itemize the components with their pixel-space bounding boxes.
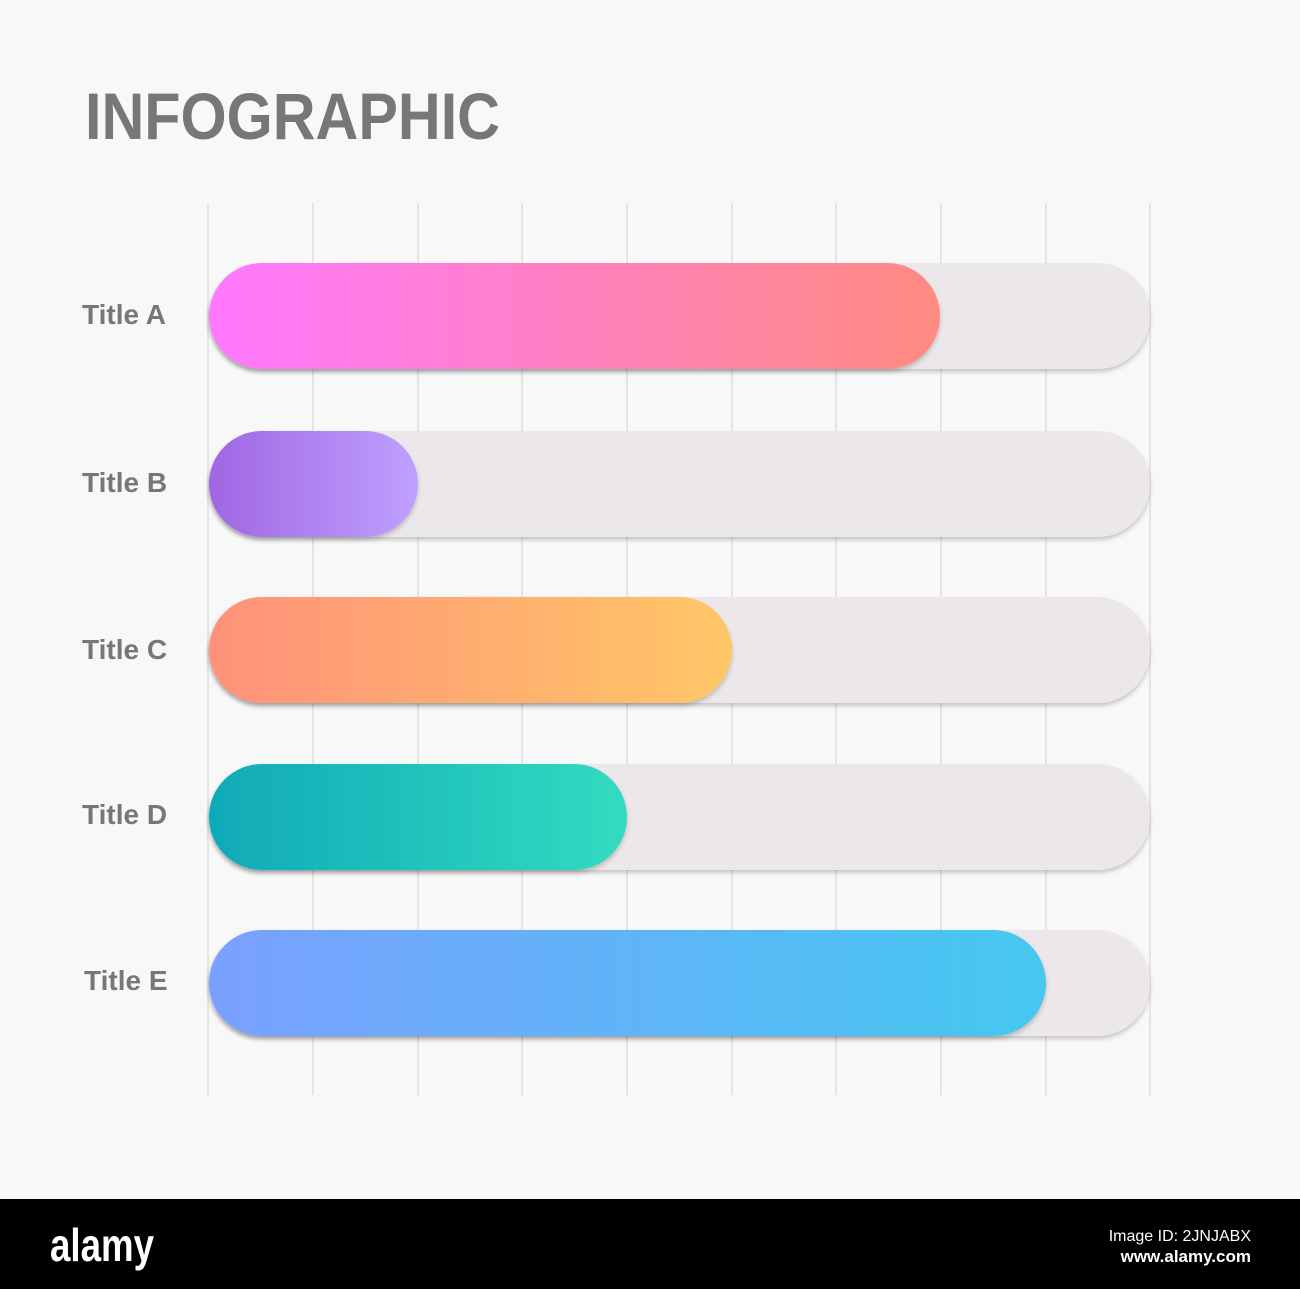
row: Title B: Title B: [82, 467, 167, 498]
title: INFOGRAPHIC: [85, 79, 500, 153]
row: Title B: [82, 431, 1150, 537]
row: Title D: [82, 764, 1150, 870]
row: Title E: [84, 930, 1150, 1036]
row: Title A: Title A: [82, 299, 166, 330]
footer image id: Image ID: 2JNJABX: [1109, 1228, 1251, 1245]
footer band: [0, 1199, 1300, 1289]
row: Title C: Title C: [82, 634, 167, 665]
footer url: www.alamy.com: [1120, 1247, 1251, 1266]
row: Title D: Title D: [82, 799, 167, 830]
bar chart: [82, 263, 1150, 1036]
row: Title C: [82, 597, 1150, 703]
row: Title A: [82, 263, 1150, 369]
row: Title E: Title E: [84, 965, 168, 996]
footer logo: alamy: [50, 1219, 154, 1271]
